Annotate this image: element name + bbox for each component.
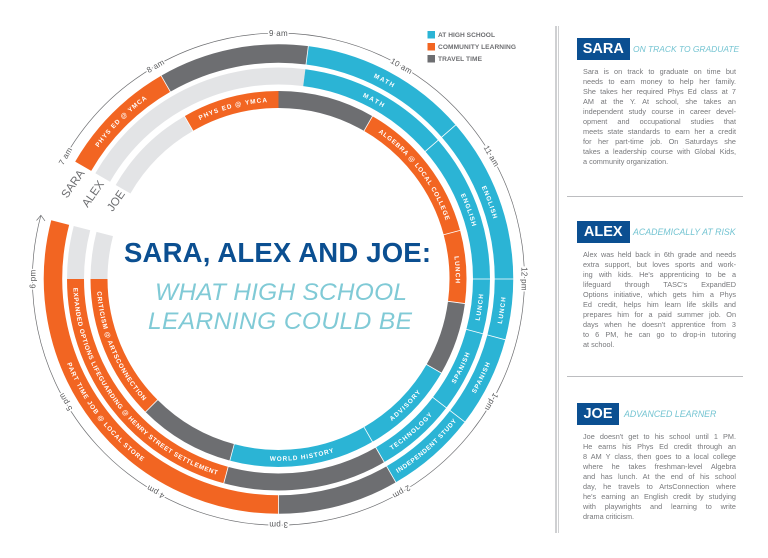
- panel: Joe: [577, 403, 736, 521]
- activity labels: Joe: CRITICISM @ ARTSCONNECTION: [97, 292, 146, 400]
- Alex name box: [577, 221, 630, 243]
- Sara: Phys Ed at YMCA: [83, 84, 166, 166]
- activity labels: Alex: LUNCH: [475, 294, 484, 320]
- hour labels: 5 pm: [57, 391, 74, 412]
- ring name: Alex: ALEX: [80, 179, 107, 210]
- Joe: World History: [232, 434, 368, 458]
- hour labels: 7 am: [57, 146, 74, 167]
- activity labels: Joe: LUNCH: [454, 256, 460, 283]
- activity labels: Sara: ENGLISH: [482, 186, 498, 218]
- activity labels: Alex: [73, 92, 484, 474]
- activity labels: Sara: INDEPENDENT STUDY: [396, 418, 456, 473]
- Alex description: Alex was held back in 6th grade and needs: [583, 250, 736, 259]
- Joe name box: [577, 403, 619, 425]
- Alex description: Ed credit, helps him learn life skills and: [583, 300, 736, 309]
- Alex: free morning: [103, 76, 304, 178]
- Alex: Math: [304, 78, 432, 146]
- Joe description: 8 AM Y class, then goes to a local college: [583, 452, 736, 461]
- Sara: Part Time Job: [53, 223, 278, 504]
- activity labels: Joe: PHYS ED @ YMCA: [198, 98, 267, 120]
- Joe: Criticism at ArtsConnection: [99, 279, 152, 406]
- panel: Alex: [577, 221, 736, 349]
- Sara tagline: ON TRACK TO GRADUATE: [633, 44, 739, 54]
- hour labels: 1 pm: [483, 391, 500, 412]
- Sara description: a community organization.: [583, 157, 668, 166]
- Joe description: day, he travels to ArtsConnection where: [583, 482, 736, 491]
- hour labels: 3 pm: [269, 520, 288, 529]
- Alex description: prepares him for a paid summer job. On: [583, 310, 736, 319]
- hour labels: 4 pm: [145, 483, 166, 500]
- activity labels: Joe: [97, 98, 460, 461]
- Joe: free morning: [123, 124, 189, 189]
- Sara name box: [577, 38, 630, 60]
- Alex description: [583, 250, 736, 349]
- Alex description: lifeguard through TASC's ExpandED: [583, 280, 736, 289]
- Joe: Advisory: [368, 369, 434, 434]
- Sara description: opment and occupational studies that: [583, 117, 736, 126]
- activity labels: Joe: WORLD HISTORY: [270, 448, 333, 461]
- Alex tagline: ACADEMICALLY AT RISK: [633, 226, 736, 236]
- Joe: free evening: [99, 234, 105, 279]
- Joe description: with playwrights and learning to write: [583, 502, 736, 511]
- Alex description: ing with kids. He's apprenticing to be a: [583, 270, 736, 279]
- Joe: Phys Ed at YMCA: [189, 100, 278, 124]
- Sara description: needs to earn money to help her family.: [583, 77, 736, 86]
- Alex: afternoon travel: [226, 455, 380, 482]
- Sara description: independent study course in career devel-: [583, 107, 736, 116]
- Sara: English: [449, 131, 504, 279]
- legend: [428, 31, 516, 63]
- subtitle: [148, 279, 413, 335]
- panel: Sara: [577, 38, 740, 166]
- Sara description: [583, 67, 736, 166]
- timeline arc with arrow: [32, 33, 524, 525]
- Sara: Spanish: [457, 337, 496, 416]
- activity labels: Alex: TECHNOLOGY: [389, 412, 432, 450]
- Joe: midday travel: [434, 302, 456, 369]
- activity labels: Alex: EXPANDED OPTIONS LIFEGUARDING @ HENRY STREET SETTLEMENT: [73, 288, 218, 474]
- legend: TRAVEL TIME: [438, 56, 483, 63]
- Sara description: takes a leadership course with Global Kids,: [583, 147, 736, 156]
- activity labels: Sara: PART TIME JOB @ LOCAL STORE: [67, 362, 144, 462]
- Alex description: at school.: [583, 340, 614, 349]
- activity labels: Joe: ALGEBRA @ LOCAL COLLEGE: [378, 130, 450, 220]
- activity labels: Alex: SPANISH: [452, 352, 470, 384]
- Joe description: he's earning an English credit by studying: [583, 492, 736, 501]
- Joe description: where he takes freshman-level Algebra: [583, 462, 736, 471]
- Joe: morning travel: [278, 100, 368, 124]
- Sara: Math: [307, 55, 449, 131]
- Joe description: drama criticism.: [583, 512, 634, 521]
- activity labels: Sara: MATH: [374, 74, 395, 88]
- Alex name box: ALEX: [584, 224, 623, 240]
- Joe tagline: ADVANCED LEARNER: [624, 408, 716, 418]
- Sara: Independent Study: [391, 416, 457, 474]
- ring name: Joe: JOE: [105, 188, 128, 214]
- Alex description: Options initiative, which gets him a Phys: [583, 290, 736, 299]
- Sara: morning travel: [166, 53, 307, 84]
- ring name: Sara: SARA: [60, 168, 88, 201]
- activity labels: Alex: MATH: [362, 92, 385, 108]
- Sara: afternoon travel: [278, 474, 391, 504]
- Sara: Lunch: [496, 279, 504, 337]
- activity labels: Sara: SPANISH: [472, 362, 490, 394]
- Joe description: He earns his Phys Ed credit through an: [583, 442, 736, 451]
- activity labels: Sara: LUNCH: [498, 297, 506, 324]
- activity labels: Alex: ENGLISH: [460, 193, 476, 226]
- Joe: Algebra at local college: [368, 124, 452, 233]
- Sara description: meets state standards to earn her a credit: [583, 127, 736, 136]
- hour labels: 12 pm: [520, 267, 529, 291]
- Joe: afternoon travel: [152, 406, 232, 452]
- Sara name box: SARA: [583, 41, 624, 57]
- Alex: Technology: [380, 403, 440, 455]
- Joe description: Joe doesn't get to his school until 1 PM.: [583, 432, 736, 441]
- Sara description: for her part-time job. On Saturdays she: [583, 137, 736, 146]
- Sara description: She takes her required Phys Ed class at 7: [583, 87, 736, 96]
- Alex description: days when he doesn't apprentice from 3: [583, 320, 736, 329]
- subtitle: LEARNING COULD BE: [148, 308, 413, 335]
- Joe: Lunch: [452, 233, 458, 302]
- hour labels: 2 pm: [391, 483, 412, 500]
- Alex description: to 6 PM, he can go to drop-in tutoring: [583, 330, 736, 339]
- activity labels: Joe: ADVISORY: [390, 390, 420, 422]
- Alex: free evening: [76, 228, 82, 279]
- Alex: Expanded Options Lifeguarding: [76, 279, 226, 475]
- Joe description: [583, 432, 736, 521]
- Alex: Spanish: [440, 332, 475, 403]
- ring: Alex schedule: [76, 76, 482, 482]
- Alex description: extra support, but loves sports and work-: [583, 260, 736, 269]
- hour labels: [28, 29, 529, 529]
- activity labels: Sara: PHYS ED @ YMCA: [95, 96, 147, 148]
- title: SARA, ALEX AND JOE:: [124, 237, 431, 268]
- hour labels: 6 pm: [28, 269, 37, 288]
- ring: Sara schedule: [53, 53, 504, 505]
- subtitle: WHAT HIGH SCHOOL: [155, 279, 407, 306]
- activity labels: Sara: [67, 74, 506, 474]
- Sara description: Sara is on track to graduate on time but: [583, 67, 736, 76]
- Alex: English: [432, 146, 482, 279]
- Sara description: AM at the Y. At school, she takes an: [583, 97, 736, 106]
- Joe description: and has lunch. At the end of his school: [583, 472, 736, 481]
- Joe name box: JOE: [583, 406, 612, 422]
- Alex: Lunch: [475, 279, 482, 332]
- hour labels: 10 am: [389, 56, 414, 76]
- legend: COMMUNITY LEARNING: [438, 44, 516, 51]
- hour labels: 8 am: [145, 58, 166, 75]
- legend: AT HIGH SCHOOL: [438, 32, 495, 39]
- hour labels: 9 am: [269, 29, 288, 38]
- ring: Joe schedule: [99, 100, 458, 458]
- hour labels: 11 am: [482, 144, 501, 168]
